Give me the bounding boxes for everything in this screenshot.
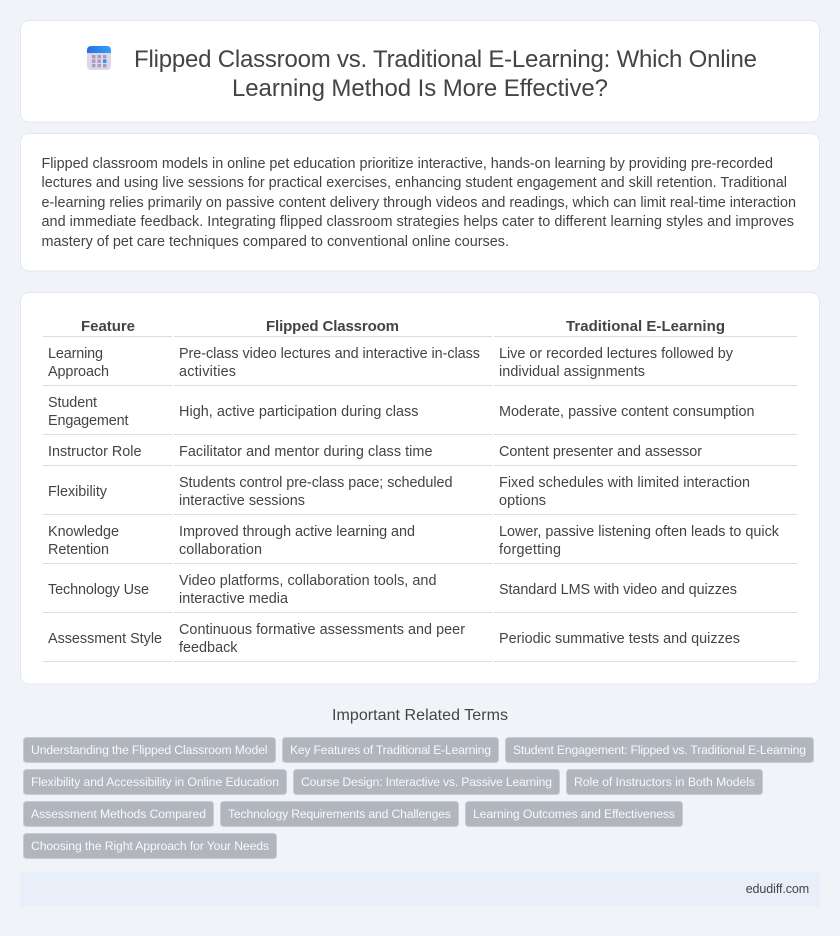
row: learning approach: Live or recorded lectures followed by [499, 346, 734, 362]
tag [506, 738, 814, 762]
row: technology use [43, 573, 797, 613]
row: instructor role: Instructor Role [48, 444, 142, 460]
row: flexibility [43, 475, 797, 515]
row: knowledge retention: forgetting [499, 542, 561, 558]
row: assessment style: Assessment Style [48, 631, 162, 647]
text block: summary paragraph: lectures and using live sessions for practical exercises, enhancing student engagement and skill retention. Traditional [42, 175, 787, 191]
table header row [43, 318, 797, 337]
row: flexibility: Students control pre-class pace; scheduled [179, 475, 452, 491]
tag: Learning Outcomes and Effectiveness [473, 807, 675, 821]
tag [220, 802, 458, 826]
row: knowledge retention: collaboration [179, 542, 262, 558]
table header row: Feature [81, 318, 135, 335]
tag: Flexibility and Accessibility in Online Education [31, 775, 279, 789]
tag [24, 738, 276, 762]
tag [566, 770, 762, 794]
table header row: Traditional E-Learning [566, 318, 725, 335]
row: learning approach: individual assignments [499, 364, 645, 380]
table header row: Flipped Classroom [266, 318, 399, 335]
tag: Understanding the Flipped Classroom Model [31, 743, 268, 757]
row: technology use: Standard LMS with video and quizzes [499, 582, 737, 598]
row: learning approach: activities [179, 364, 236, 380]
row: knowledge retention: Lower, passive listening often leads to quick [499, 524, 780, 540]
panel: introduction [20, 134, 820, 271]
text block: summary paragraph: Flipped classroom models in online pet education prioritize interactive, hands-on learning by providing pre-recorded [42, 156, 773, 172]
row: assessment style: feedback [179, 640, 238, 656]
row: knowledge retention [43, 524, 797, 564]
tag: Choosing the Right Approach for Your Needs [31, 839, 269, 853]
tag: Assessment Methods Compared [31, 807, 206, 821]
row: student engagement: Engagement [48, 413, 128, 429]
tag [294, 770, 560, 794]
panel: comparison table [20, 292, 820, 684]
tag [466, 802, 682, 826]
tag: Role of Instructors in Both Models [574, 775, 755, 789]
row: flexibility: options [499, 493, 546, 509]
tag [24, 770, 286, 794]
tag [24, 834, 276, 858]
text block: summary paragraph: e-learning relies primarily on passive content delivery through videos and readings, which can limit real-time interaction [42, 195, 796, 211]
tag: Key Features of Traditional E-Learning [290, 743, 491, 757]
row: learning approach: Pre-class video lectures and interactive in-class [179, 346, 480, 362]
row: student engagement: Moderate, passive content consumption [499, 404, 754, 420]
row: assessment style [43, 622, 797, 662]
row: instructor role: Facilitator and mentor during class time [179, 444, 432, 460]
row: learning approach: Learning [48, 346, 103, 362]
text block: summary paragraph [42, 156, 796, 250]
tag [24, 802, 214, 826]
row: knowledge retention: Knowledge [48, 524, 119, 540]
row: flexibility: Fixed schedules with limited interaction [499, 475, 750, 491]
row: technology use: Video platforms, collaboration tools, and [179, 573, 436, 589]
footer: edudiff.com [746, 882, 809, 896]
row: learning approach [43, 346, 797, 386]
heading: important related terms: Important Related Terms [332, 707, 508, 724]
row: knowledge retention: Improved through active learning and [179, 524, 415, 540]
title [134, 46, 757, 102]
row: student engagement: Student [48, 395, 97, 411]
row: technology use: Technology Use [48, 582, 149, 598]
row: student engagement [43, 395, 797, 435]
row: student engagement: High, active participation during class [179, 404, 418, 420]
title: Flipped Classroom vs. Traditional E-Learning: Which Online [134, 46, 757, 73]
title: Learning Method Is More Effective? [232, 75, 608, 102]
text block: summary paragraph: and immediate feedback. Integrating flipped classroom strategies helps cater to different learning styles and improves [42, 214, 794, 230]
tag: Course Design: Interactive vs. Passive Learning [301, 775, 552, 789]
row: learning approach: Approach [48, 364, 109, 380]
row: flexibility: interactive sessions [179, 493, 305, 509]
text block: summary paragraph: mastery of pet care techniques compared to conventional online courses. [42, 234, 509, 250]
row: assessment style: Periodic summative tests and quizzes [499, 631, 740, 647]
row: assessment style: Continuous formative assessments and peer [179, 622, 465, 638]
tag [282, 738, 498, 762]
row: knowledge retention: Retention [48, 542, 109, 558]
row: instructor role: Content presenter and assessor [499, 444, 702, 460]
tag list: related terms [24, 738, 814, 858]
row: technology use: interactive media [179, 591, 288, 607]
tag: Student Engagement: Flipped vs. Traditional E-Learning [513, 743, 806, 757]
icon: calendar [87, 46, 111, 70]
row: flexibility: Flexibility [48, 484, 108, 500]
tag: Technology Requirements and Challenges [228, 807, 451, 821]
row: instructor role [43, 444, 797, 466]
footer [20, 872, 820, 906]
panel: header [20, 20, 820, 122]
